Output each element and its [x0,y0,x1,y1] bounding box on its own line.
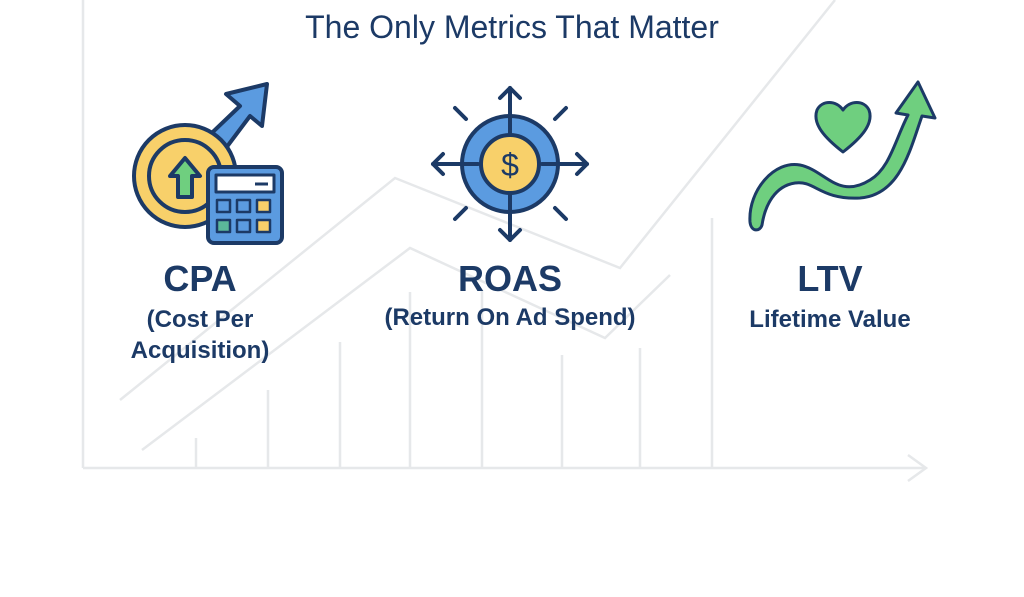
title: The Only Metrics That Matter [305,9,719,45]
text: LTV subtitle: Lifetime Value [749,306,911,333]
icon: CPA coin, arrow and calculator [134,84,282,243]
icon: LTV heart and growth curve [750,82,935,230]
text: LTV: LTV [797,258,863,299]
text: CPA subtitle [131,306,269,364]
text: CPA subtitle: (Cost Per [147,306,253,333]
text: CPA: CPA [163,258,237,299]
icon: ROAS target with dollar [433,88,587,240]
text: ROAS: ROAS [458,258,562,299]
text: ROAS subtitle: (Return On Ad Spend) [384,304,636,331]
text: CPA subtitle: Acquisition) [131,337,269,364]
icon: ROAS target with dollar: $ [501,147,519,183]
